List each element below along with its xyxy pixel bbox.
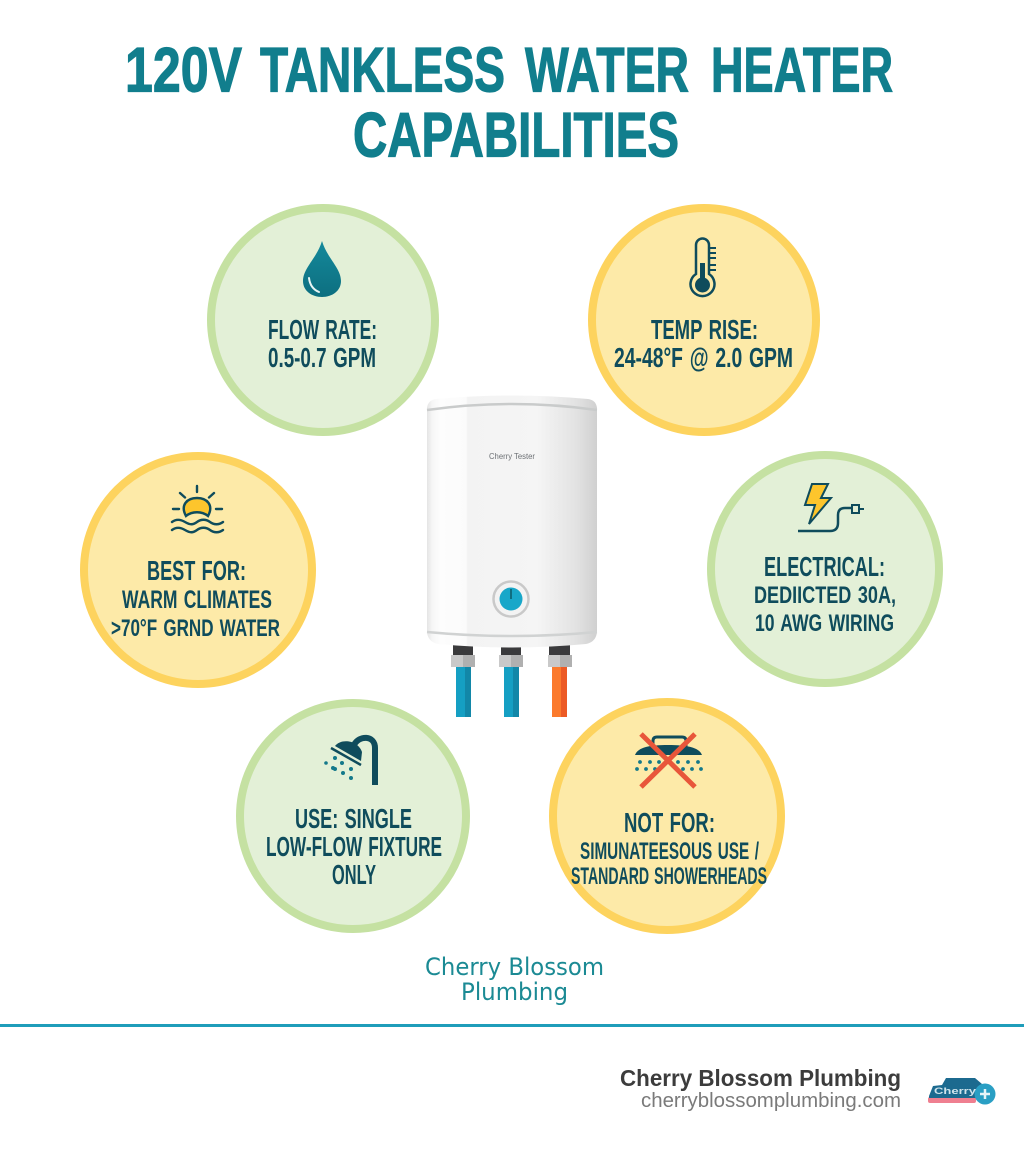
text: temp rise: 24-48°F @ 2.0 GPM	[614, 342, 793, 373]
footer text: Cherry Blossom Plumbing	[620, 1065, 901, 1091]
icon: crossed-out showerhead	[635, 734, 703, 787]
text: not for	[571, 807, 767, 890]
panel: not for	[553, 702, 781, 930]
text: use: ONLY	[332, 859, 376, 890]
footer logo	[928, 1078, 996, 1104]
text: best for	[111, 555, 280, 642]
brand name: Cherry Blossom	[425, 953, 604, 981]
brand name	[425, 953, 604, 1006]
text: best for: >70°F GRND WATER	[111, 615, 280, 642]
text: temp rise	[614, 314, 793, 373]
title	[125, 36, 893, 170]
text: flow rate: 0.5-0.7 GPM	[268, 342, 376, 373]
icon: thermometer	[690, 239, 716, 296]
icon: sun over water	[172, 486, 223, 532]
text: electrical: ELECTRICAL:	[764, 551, 885, 582]
panel: temp rise	[592, 208, 816, 432]
water heater illustration	[427, 396, 597, 717]
icon: lightning and plug	[798, 484, 864, 531]
footer text: cherryblossomplumbing.com	[641, 1090, 901, 1112]
text: not for: STANDARD SHOWERHEADS	[571, 863, 767, 890]
text: temp rise: TEMP RISE:	[651, 314, 758, 345]
text: best for: BEST FOR:	[147, 555, 246, 586]
footer text	[620, 1065, 901, 1112]
panel: use	[240, 703, 466, 929]
text: use: USE: SINGLE	[295, 803, 412, 834]
title: CAPABILITIES	[353, 100, 679, 170]
title: HEATER	[711, 36, 893, 106]
text: best for: WARM CLIMATES	[122, 586, 272, 614]
text: electrical: DEDIICTED 30A,	[754, 582, 896, 609]
text: electrical	[754, 551, 896, 637]
control dial	[494, 582, 528, 616]
icon: water drop	[303, 241, 341, 297]
text: flow rate	[268, 314, 377, 373]
title: 120V	[125, 36, 242, 106]
heater body	[427, 396, 597, 648]
title: WATER	[525, 36, 689, 106]
brand name: Plumbing	[461, 978, 568, 1006]
text: not for: NOT FOR:	[624, 807, 715, 838]
pipes	[456, 667, 567, 717]
text: use: LOW-FLOW FIXTURE	[266, 831, 442, 862]
footer divider	[0, 1024, 1024, 1027]
panel: electrical	[711, 455, 939, 683]
text: not for: SIMUNATEESOUS USE /	[580, 838, 759, 865]
text: flow rate: FLOW RATE:	[268, 314, 377, 345]
text: use	[266, 803, 442, 890]
panel: best for	[84, 456, 312, 684]
heater brand label: Cherry Tester	[489, 452, 535, 461]
pipe fittings	[451, 645, 572, 667]
icon: shower	[324, 738, 375, 785]
footer logo: Cherry	[934, 1086, 976, 1096]
text: electrical: 10 AWG WIRING	[755, 610, 894, 637]
panel: flow rate	[211, 208, 435, 432]
title: TANKLESS	[260, 36, 505, 106]
